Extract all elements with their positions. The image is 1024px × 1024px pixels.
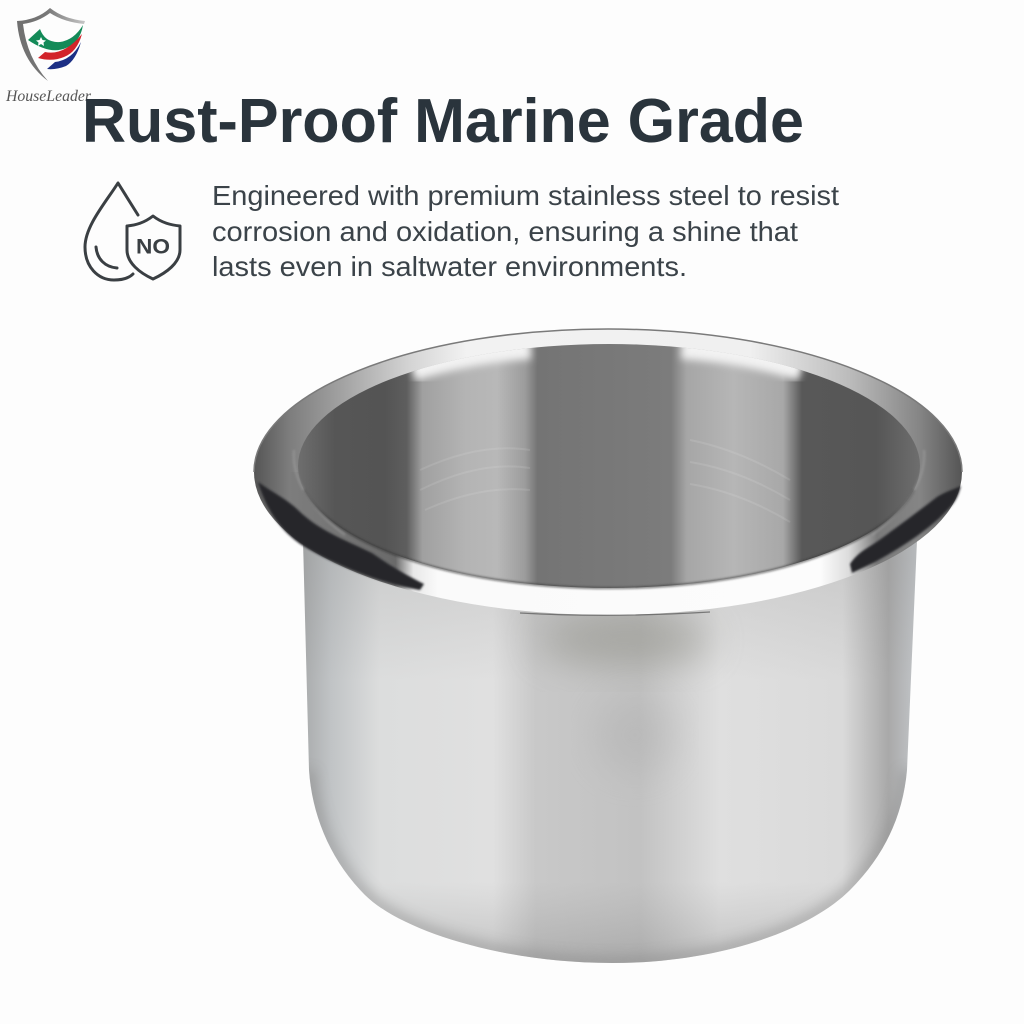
icon: water drop with NO shield <box>85 183 180 280</box>
title: Rust-Proof Marine Grade <box>82 87 804 156</box>
logo blue flag <box>47 42 81 69</box>
icon: NO label: NO <box>136 236 170 258</box>
description line 1: Engineered with premium stainless steel to resist <box>212 180 839 211</box>
cup body <box>300 540 920 965</box>
brand logo <box>5 8 92 105</box>
rim lower edge line <box>520 612 710 615</box>
logo red flag <box>38 34 82 60</box>
cup rim <box>254 329 962 615</box>
description line 3: lasts even in saltwater environments. <box>212 251 687 282</box>
rim inner highlight left <box>294 450 345 535</box>
rim dark reflection left <box>258 482 424 590</box>
description line 2: corrosion and oxidation, ensuring a shine that <box>212 216 798 247</box>
logo wordmark: HouseLeader <box>5 88 92 105</box>
interior lower edge line <box>304 490 914 588</box>
interior upper reflections <box>412 346 530 368</box>
logo shield outline <box>17 8 85 81</box>
icon: drop highlight <box>96 247 117 268</box>
icon: shield <box>127 216 180 279</box>
icon: water drop <box>85 183 138 280</box>
rim dark reflection right <box>850 486 961 573</box>
description text <box>212 180 839 282</box>
logo star <box>36 37 46 46</box>
logo green flag <box>28 25 83 50</box>
cup interior <box>294 344 924 588</box>
rim inner highlight right <box>872 450 924 535</box>
product photo: stainless steel cup <box>254 329 962 965</box>
